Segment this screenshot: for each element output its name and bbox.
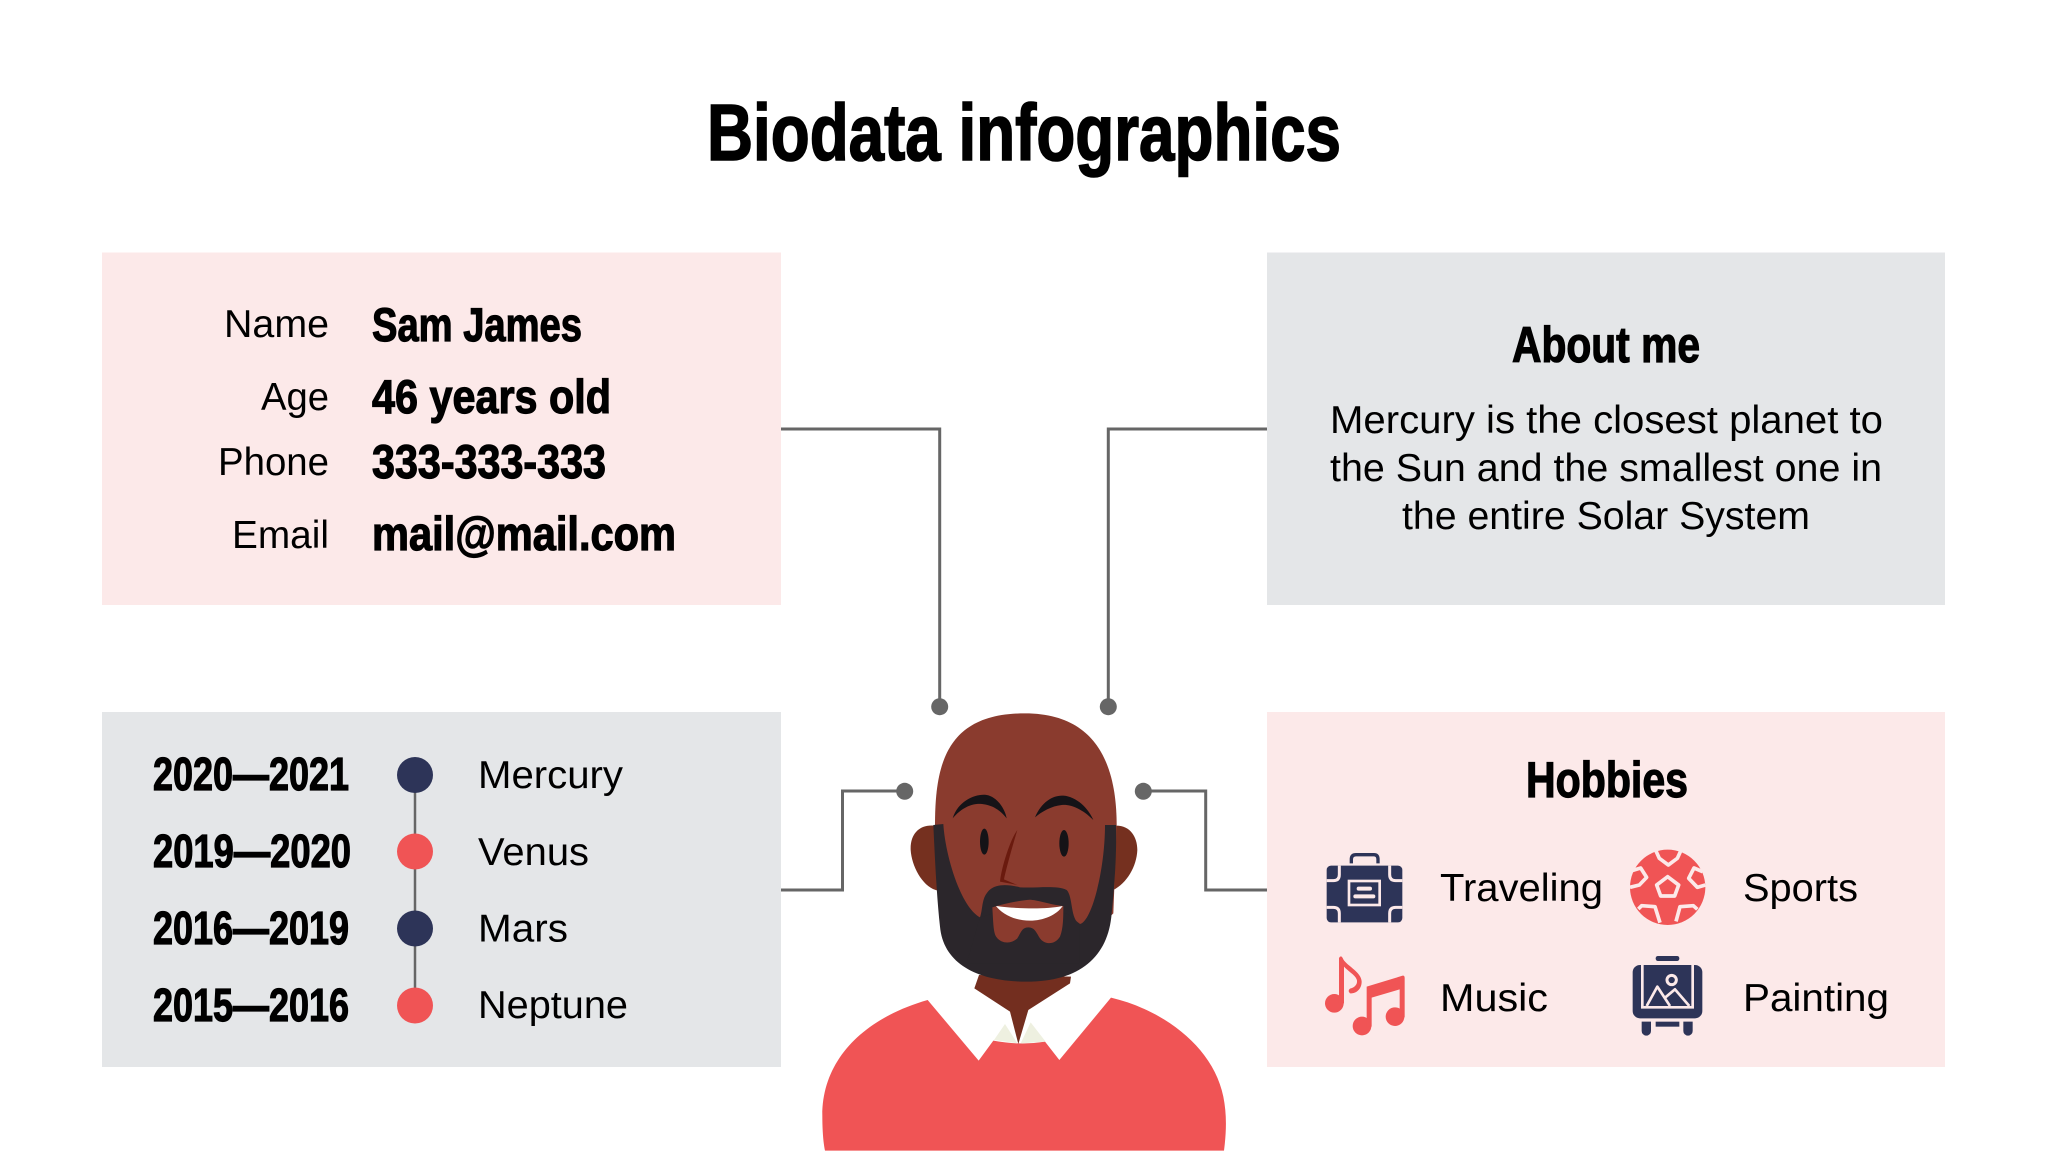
eyes [980, 829, 1069, 857]
timeline row: Venus: Venus [478, 831, 589, 874]
neck [974, 975, 1071, 1044]
value: email: mail@mail.com [372, 507, 676, 560]
eyebrows [953, 795, 1093, 820]
panel: personal details [102, 252, 781, 605]
timeline row: Mars [153, 902, 568, 954]
nose [1000, 830, 1017, 885]
hobby labels [1440, 867, 1889, 1020]
sweater [822, 998, 1226, 1151]
smile [996, 906, 1063, 921]
connector: timeline to head [781, 783, 913, 890]
head [935, 713, 1117, 947]
ears [911, 825, 1137, 891]
chin skin [992, 900, 1063, 943]
heading: hobbies: Hobbies [1526, 752, 1688, 808]
beard fill below mouth [967, 913, 1080, 963]
hobby labels: Painting [1743, 977, 1889, 1020]
about me text: the entire Solar System [1402, 495, 1810, 538]
icon: easel painting [1633, 956, 1702, 1036]
timeline row: Venus [153, 825, 589, 877]
timeline row: Neptune: Neptune [478, 984, 628, 1027]
connector: hobbies to head [1135, 783, 1267, 890]
timeline connector [414, 775, 416, 1005]
icon: ball [1630, 850, 1705, 925]
hobby labels: Sports [1743, 867, 1858, 910]
hobby labels: Traveling [1440, 867, 1603, 910]
illustration: bearded man [822, 713, 1226, 1151]
timeline row: Mercury: Mercury [478, 754, 624, 797]
timeline row: Neptune: 2015—2016 [153, 979, 349, 1031]
label: email: Email [232, 514, 329, 557]
about me text: Mercury is the closest planet to [1330, 399, 1883, 442]
connector: about me to head [1100, 429, 1267, 715]
panel: about me [1267, 252, 1945, 605]
title: Biodata infographics [707, 88, 1341, 177]
timeline row: Mars: Mars [478, 908, 568, 950]
icon: suitcase [1327, 855, 1402, 922]
label: phone: Phone [218, 441, 329, 484]
label: name: Name [224, 303, 329, 346]
heading: about me: About me [1512, 317, 1700, 373]
hobby icons [1325, 855, 1405, 1035]
icon: music notes [1325, 956, 1405, 1035]
panel: hobbies [1267, 712, 1945, 1067]
timeline row: Venus: 2019—2020 [153, 825, 351, 877]
timeline row: Mercury: 2020—2021 [153, 748, 349, 800]
timeline row: Mercury [153, 748, 624, 800]
connector: details to head [781, 429, 948, 715]
timeline row: Neptune [153, 979, 628, 1031]
value: age: 46 years old [372, 370, 611, 423]
value: phone: 333-333-333 [372, 435, 606, 488]
label: age: Age [261, 376, 329, 419]
about me text [1330, 399, 1883, 538]
value: name: Sam James [372, 298, 582, 351]
undershirt [994, 1022, 1046, 1043]
panel: timeline [102, 712, 781, 1067]
beard [933, 824, 1116, 982]
about me text: the Sun and the smallest one in [1330, 447, 1882, 490]
hobby labels: Music [1440, 977, 1548, 1020]
timeline row: Mars: 2016—2019 [153, 902, 349, 954]
